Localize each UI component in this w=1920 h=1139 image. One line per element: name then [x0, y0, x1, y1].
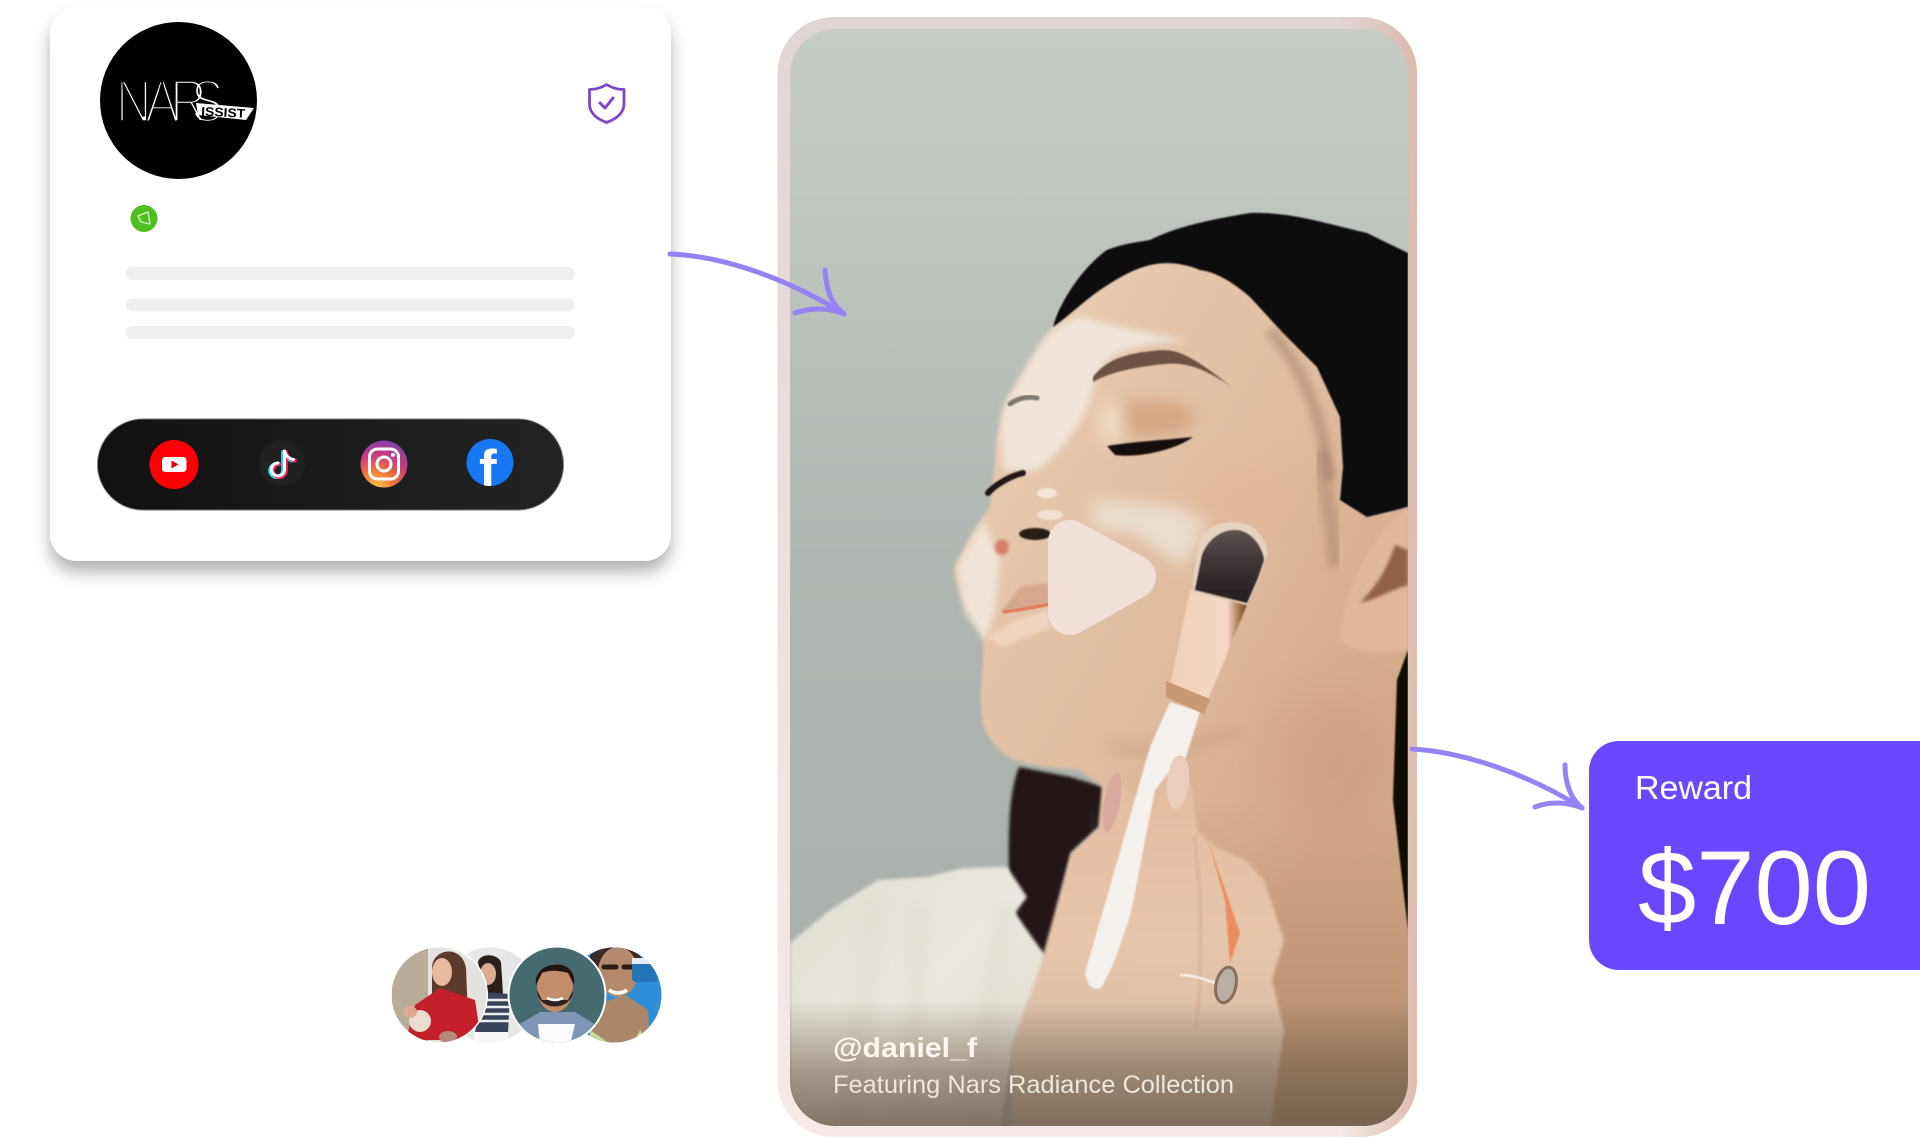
icon: Facebook: f [479, 440, 497, 499]
brand logo: NARSISSIST: S [191, 67, 224, 135]
card background [50, 7, 671, 561]
creator avatars group [390, 945, 665, 1046]
arrow: video to reward [1412, 749, 1582, 808]
reward amount: $700 [1638, 830, 1871, 947]
brand logo: NARSISSIST: R [170, 68, 207, 135]
phone frame [778, 17, 1417, 1137]
play button [1070, 542, 1134, 613]
brand logo: NARSISSIST: ISSIST [201, 105, 246, 121]
avatar: woman in striped top [466, 948, 522, 1042]
icon: Facebook [466, 439, 514, 486]
video caption: Featuring Nars Radiance Collection [833, 1071, 1234, 1099]
reward label: Reward [1635, 769, 1752, 806]
placeholder text lines [126, 267, 575, 339]
panel: brand profile card [50, 7, 671, 561]
icon: Instagram [360, 440, 408, 488]
icon: verified shield [590, 84, 624, 122]
brand logo: NARSISSIST [100, 22, 257, 179]
icon: green megaphone badge [130, 205, 158, 232]
social media pill [98, 419, 564, 510]
avatar: woman in red sweater [390, 945, 490, 1045]
brand logo: NARSISSIST: N [116, 67, 152, 135]
photo: woman applying cosmetics with a brush [790, 29, 1408, 1130]
icon: YouTube [150, 440, 198, 489]
panel: phone video frame [778, 17, 1417, 1137]
brand logo: NARSISSIST: A [145, 68, 180, 135]
icon: TikTok [259, 440, 305, 486]
panel: reward box [1589, 741, 1920, 970]
avatar: man in blue blazer [505, 945, 609, 1045]
creator handle: @daniel_f [833, 1032, 978, 1063]
avatar: woman holding blue jar [587, 948, 662, 1042]
arrow: card to video [670, 254, 844, 314]
